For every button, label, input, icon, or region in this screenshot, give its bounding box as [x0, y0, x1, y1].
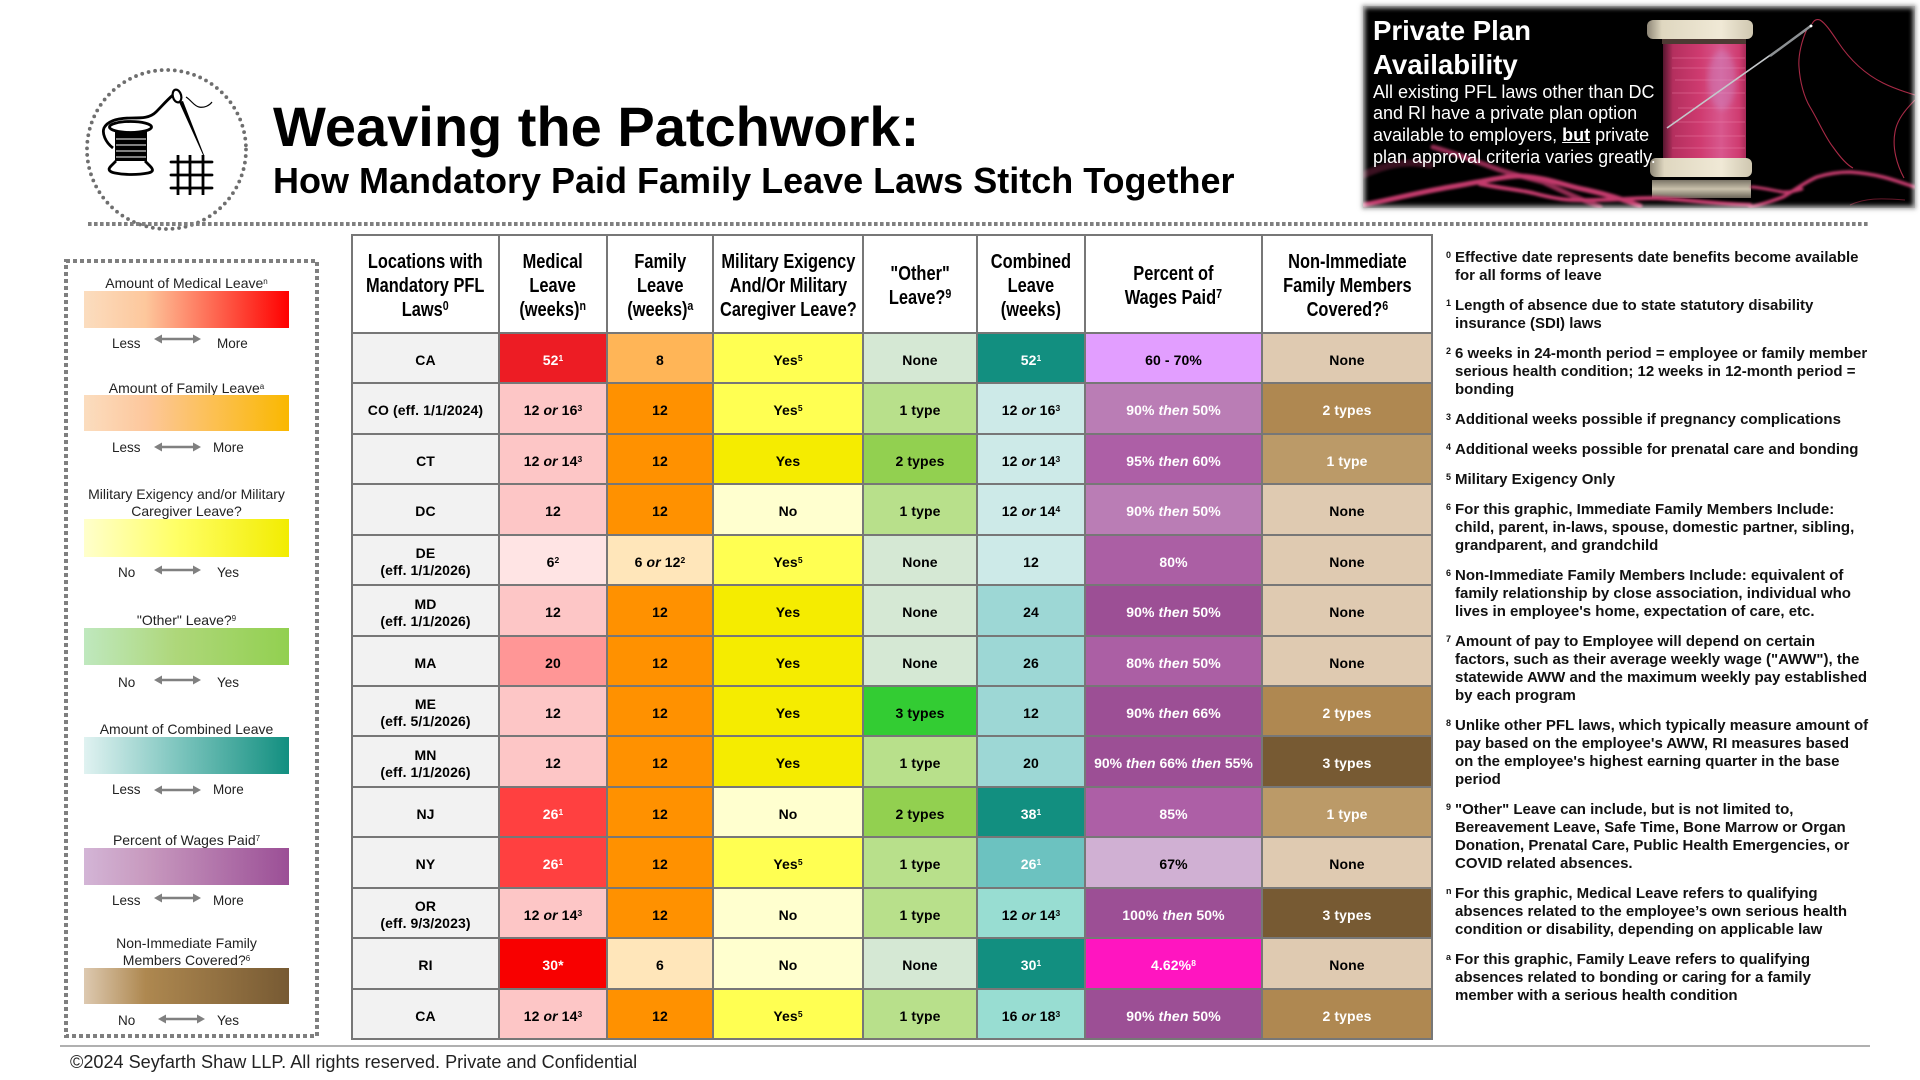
row: CA: None	[1329, 352, 1365, 368]
gradient bar: wages paid	[84, 848, 289, 885]
row: RI	[353, 939, 1431, 988]
row: RI: 4.62%8	[1151, 957, 1196, 973]
row: CT: 95% then 60%	[1126, 452, 1221, 468]
row: NY: 1 type	[899, 856, 941, 872]
legend item: family leave: More	[213, 440, 244, 454]
row: ME: Yes	[776, 704, 800, 720]
row: CA (second): 16 or 183	[1002, 1008, 1060, 1024]
footnote a	[1455, 951, 1811, 1005]
row: MD: 12	[652, 604, 668, 620]
row: NJ	[353, 788, 1431, 836]
column heading: locations	[353, 236, 498, 332]
footnote n: For this graphic, Medical Leave refers to qualifying	[1455, 885, 1818, 902]
footnote 2: 6 weeks in 24-month period = employee or family member	[1455, 345, 1867, 362]
row: CA (second): Yes5	[773, 1008, 803, 1024]
row: MA: None	[1329, 654, 1365, 670]
row: MD	[353, 586, 1431, 635]
footnote 1	[1446, 297, 1814, 332]
gradient bar: military leave	[84, 519, 289, 557]
column heading: family leave: (weeks)a	[627, 298, 693, 321]
row: ME	[353, 687, 1431, 735]
row: MN: 20	[1023, 755, 1039, 771]
row: MA: Yes	[776, 654, 800, 670]
heading: private plan availability: Private Plan	[1373, 15, 1531, 46]
text block: private plan note: and RI have a private plan option	[1373, 103, 1637, 123]
row: MN: 12	[652, 755, 668, 771]
row: OR: OR	[415, 898, 436, 914]
footnote 7: factors, such as their average weekly wage ("AWW"), the	[1455, 651, 1859, 668]
gradient bar: other leave	[84, 628, 289, 665]
row: MA: 20	[545, 654, 561, 670]
row: MD: 24	[1023, 604, 1039, 620]
table: paid family leave laws by location	[351, 234, 1433, 1040]
text block: private plan note	[1373, 82, 1656, 167]
row: NJ: 1 type	[1326, 806, 1368, 822]
column heading: combined leave: (weeks)	[1001, 299, 1061, 321]
footnote 8: pay based on the employee's AWW, RI measures based	[1455, 735, 1849, 752]
heading: private plan availability: Availability	[1373, 48, 1518, 80]
row: CT: 12 or 143	[524, 452, 582, 468]
row: NY: Yes5	[773, 856, 803, 872]
row: CA: 60 - 70%	[1145, 352, 1202, 368]
legend item: wages paid: More	[213, 892, 244, 908]
footnote 6: non-immediate family: Non-Immediate Family Members Include: equivalent of	[1455, 567, 1843, 584]
row: NJ: 85%	[1159, 806, 1188, 822]
footnote 2	[1446, 345, 1867, 398]
row: CT	[353, 435, 1431, 483]
row: RI: 301	[1021, 957, 1041, 973]
footnote 5: Military Exigency Only	[1455, 471, 1615, 488]
footnote 9: Donation, Prenatal Care, Public Health Emergencies, or	[1455, 837, 1849, 854]
arrow: less to more	[154, 894, 201, 902]
row: CA: 521	[543, 352, 563, 368]
row: NY: 67%	[1159, 856, 1188, 872]
column heading: medical leave: (weeks)n	[520, 298, 586, 321]
footnote 7	[1455, 633, 1867, 705]
footnote a: member with a serious health condition	[1455, 987, 1738, 1004]
text block: private plan note: All existing PFL laws other than DC	[1373, 82, 1654, 102]
column heading: locations: Laws0	[402, 298, 449, 321]
arrow: no to yes	[158, 1014, 205, 1024]
legend item: medical leave: More	[217, 336, 248, 350]
row: MA: MA	[414, 654, 436, 670]
footnotes: 2	[1446, 346, 1451, 356]
footnotes: n	[1446, 886, 1452, 896]
row: CO: 12	[652, 402, 668, 418]
footnotes: 3	[1446, 412, 1451, 422]
column heading: non-immediate family	[1263, 236, 1431, 332]
row: RI: None	[902, 957, 938, 973]
row: OR: 3 types	[1323, 906, 1371, 922]
row: DE: None	[1329, 554, 1365, 570]
column heading: locations: Locations with	[368, 251, 483, 273]
row: CO: Yes5	[773, 402, 803, 418]
row: ME: 2 types	[1323, 704, 1371, 720]
row: MA: 12	[652, 654, 668, 670]
column heading: combined leave: Leave	[1008, 275, 1054, 297]
legend item: other leave: No	[118, 674, 135, 690]
row: NY	[353, 838, 1431, 887]
row: CO: 1 type	[899, 402, 941, 418]
legend item: military leave: Caregiver Leave?	[131, 503, 242, 519]
footnotes: 4	[1446, 442, 1451, 452]
legend item: family leave	[84, 380, 289, 454]
row: MN: 90% then 66% then 55%	[1094, 755, 1253, 771]
row: OR: 1 type	[899, 906, 941, 922]
column heading: percent of wages	[1086, 236, 1261, 332]
footnote n: absences related to the employee’s own serious health	[1455, 903, 1847, 920]
row: MD: (eff. 1/1/2026)	[380, 612, 471, 628]
legend item: military leave: Military Exigency and/or Military	[88, 486, 285, 502]
legend item: medical leave	[84, 274, 289, 350]
row: DC: 90% then 50%	[1126, 503, 1221, 519]
row: NJ: NJ	[416, 806, 435, 822]
legend item: combined leave: Amount of Combined Leave	[100, 720, 273, 736]
column heading: non-immediate family: Non-Immediate	[1288, 251, 1406, 273]
row: MD: None	[1329, 604, 1365, 620]
row: OR	[353, 889, 1431, 937]
column heading: military leave: And/Or Military	[729, 275, 847, 297]
footnote 7: by each program	[1455, 687, 1576, 704]
row: MA: None	[902, 654, 938, 670]
row: CO: CO (eff. 1/1/2024)	[368, 402, 483, 418]
gradient bar: non-immediate family members	[84, 968, 289, 1004]
legend item: military leave: No	[118, 564, 135, 580]
row: ME: 12	[1023, 704, 1039, 720]
row: ME: 90% then 66%	[1126, 704, 1221, 720]
column heading: family leave: Family	[634, 251, 686, 273]
legend item: non-immediate family members: Members Covered?6	[123, 952, 250, 968]
row: MD: Yes	[776, 604, 800, 620]
footnotes: 1	[1446, 298, 1451, 308]
row: NY: 12	[652, 856, 668, 872]
column heading: medical leave	[500, 236, 606, 332]
footnote n	[1455, 885, 1847, 939]
legend item: medical leave: Less	[112, 336, 141, 350]
row: CT: 12 or 143	[1002, 452, 1060, 468]
row: CA: 8	[656, 352, 664, 368]
row: CO: 2 types	[1323, 402, 1371, 418]
row: DC: No	[779, 503, 797, 519]
title: Weaving the Patchwork:	[273, 95, 919, 158]
footnote 7: Amount of pay to Employee will depend on certain	[1455, 633, 1815, 650]
footnotes: 0	[1446, 250, 1451, 260]
footnote 6: non-immediate family: family relationship by close association, individual who	[1455, 585, 1851, 602]
footnotes: 6	[1446, 502, 1451, 512]
footnote 6: immediate family: For this graphic, Immediate Family Members Include:	[1455, 501, 1834, 518]
legend item: family leave: Less	[112, 440, 141, 454]
arrow: no to yes	[154, 566, 201, 574]
row: CA: CA	[415, 352, 436, 368]
footnote 6: immediate family: child, parent, in-laws, spouse, domestic partner, sibling,	[1455, 519, 1854, 536]
row: DE	[353, 536, 1431, 584]
row: ME: 12	[652, 704, 668, 720]
footnote 9: COVID related absences.	[1455, 855, 1633, 872]
footnote a: For this graphic, Family Leave refers to qualifying	[1455, 951, 1810, 968]
column heading: medical leave: Leave	[530, 275, 576, 297]
row: MA	[353, 637, 1431, 685]
footnote 8: on the employee's highest earning quarter in the base	[1455, 753, 1840, 770]
row: NJ: 12	[652, 806, 668, 822]
row: NY: 261	[543, 856, 563, 872]
row: CA: Yes5	[773, 352, 803, 368]
image: thread spool and needle	[1363, 19, 1915, 208]
row: DC: 12 or 144	[1002, 503, 1060, 519]
row: CA (second): 90% then 50%	[1126, 1008, 1221, 1024]
footnote 0: Effective date represents date benefits become available	[1455, 249, 1858, 266]
icon: dotted circle with spool, needle and stitches	[85, 68, 248, 231]
footnote 4: Additional weeks possible for prenatal care and bonding	[1455, 441, 1858, 458]
legend item: non-immediate family members: Non-Immediate Family	[116, 934, 257, 950]
legend item: non-immediate family members: No	[118, 1012, 135, 1028]
row: DE: None	[902, 554, 938, 570]
legend item: wages paid	[84, 832, 289, 908]
footnotes: 8	[1446, 718, 1451, 728]
footnote 0	[1446, 249, 1858, 284]
row: RI: 30*	[542, 957, 564, 973]
row: MN: 12	[545, 755, 561, 771]
footnote 2: serious health condition; 12 weeks in 12-month period =	[1455, 363, 1856, 380]
row: DC: 12	[545, 503, 561, 519]
row: CT: CT	[416, 452, 435, 468]
legend item: combined leave: More	[213, 782, 244, 796]
column heading: non-immediate family: Covered?6	[1306, 298, 1388, 321]
row: OR: 12 or 143	[524, 906, 582, 922]
row: MD: 12	[545, 604, 561, 620]
row: CO: 12 or 163	[524, 402, 582, 418]
column heading: other leave: Leave?9	[889, 286, 951, 309]
row: MN: MN	[414, 746, 436, 762]
row: CT: Yes	[776, 452, 800, 468]
row: DE: 12	[1023, 554, 1039, 570]
legend item: medical leave: Amount of Medical Leaven	[105, 274, 268, 290]
legend item: military leave: Yes	[217, 564, 239, 580]
footnote 9	[1455, 801, 1849, 873]
footnotes: a	[1446, 952, 1451, 962]
column heading: combined leave	[978, 236, 1084, 332]
column heading: combined leave: Combined	[991, 251, 1071, 273]
footnote 1: Length of absence due to state statutory disability	[1455, 297, 1813, 314]
row: ME: 12	[545, 704, 561, 720]
legend item: combined leave: Less	[112, 782, 141, 796]
column heading: non-immediate family: Family Members	[1283, 275, 1411, 297]
row: DE: Yes5	[773, 554, 803, 570]
column heading: percent of wages: Percent of	[1133, 263, 1214, 285]
footnote 0: for all forms of leave	[1455, 267, 1602, 284]
footnote 6: non-immediate family: lives in employee's home, expectation of care, etc.	[1455, 603, 1815, 620]
row: CA: None	[902, 352, 938, 368]
footnote 8: Unlike other PFL laws, which typically measure amount of	[1455, 717, 1868, 734]
footnote 8	[1455, 717, 1868, 789]
row: ME: 3 types	[896, 704, 944, 720]
footnotes: 9	[1446, 802, 1451, 812]
legend item: non-immediate family members	[84, 934, 289, 1028]
row: MN	[353, 737, 1431, 786]
column heading: military leave	[714, 236, 862, 332]
legend item: other leave: Yes	[217, 674, 239, 690]
gradient bar: combined leave	[84, 737, 289, 774]
row: CA (second): 12	[652, 1008, 668, 1024]
row: CO: 90% then 50%	[1126, 402, 1221, 418]
column heading: family leave	[608, 236, 712, 332]
column heading: family leave: Leave	[637, 275, 683, 297]
arrow: no to yes	[154, 676, 201, 684]
row: MA: 26	[1023, 654, 1039, 670]
row: DE: (eff. 1/1/2026)	[380, 562, 471, 578]
row: CA (second): 12 or 143	[524, 1008, 582, 1024]
gradient bar: family leave	[84, 395, 289, 431]
row: CA (second): 1 type	[899, 1008, 941, 1024]
row: RI: No	[779, 957, 797, 973]
row: MN: 1 type	[899, 755, 941, 771]
row: MA: 80% then 50%	[1126, 654, 1221, 670]
row: CA (second): CA	[415, 1008, 436, 1024]
legend item: family leave: Amount of Family Leavea	[109, 380, 264, 396]
row: DE: 6 or 122	[635, 554, 685, 570]
legend item: wages paid: Percent of Wages Paid7	[113, 832, 260, 848]
row: MN: 3 types	[1323, 755, 1371, 771]
row: CA	[353, 334, 1431, 382]
footnote 6: immediate family: grandparent, and grandchild	[1455, 537, 1658, 554]
heading: private plan availability	[1373, 15, 1531, 80]
arrow: less to more	[154, 786, 201, 794]
row: MN: (eff. 1/1/2026)	[380, 764, 471, 780]
row: MD: MD	[414, 596, 436, 612]
table header row	[353, 236, 1431, 332]
row: NY: 261	[1021, 856, 1041, 872]
row: DE: DE	[416, 545, 435, 561]
row: MD: 90% then 50%	[1126, 604, 1221, 620]
row: NY: None	[1329, 856, 1365, 872]
row: DC	[353, 485, 1431, 534]
column heading: military leave: Caregiver Leave?	[720, 299, 856, 321]
legend item: military leave	[84, 486, 289, 580]
row: NJ: 2 types	[896, 806, 944, 822]
column heading: other leave: "Other"	[890, 263, 950, 285]
arrow: less to more	[154, 442, 201, 452]
legend item: wages paid: Less	[112, 892, 141, 908]
row: DE: 80%	[1159, 554, 1188, 570]
row: CA (second)	[353, 990, 1431, 1038]
column heading: percent of wages: Wages Paid7	[1125, 286, 1222, 309]
text block: private plan note: available to employers, but private	[1373, 125, 1649, 145]
panel: private plan availability	[1363, 6, 1915, 208]
row: RI: RI	[418, 957, 433, 973]
footnote 6: non-immediate family	[1455, 567, 1851, 621]
row: CT: 12	[652, 452, 668, 468]
row: DC: 1 type	[899, 503, 941, 519]
row: RI: None	[1329, 957, 1365, 973]
row: CO	[353, 384, 1431, 433]
row: CT: 2 types	[896, 452, 944, 468]
row: RI: 6	[656, 957, 664, 973]
footnote 9: Bereavement Leave, Safe Time, Bone Marrow or Organ	[1455, 819, 1846, 836]
legend item: other leave: "Other" Leave?9	[137, 612, 236, 628]
footnotes: 7	[1446, 634, 1451, 644]
footnote a: absences related to bonding or caring for a family	[1455, 969, 1811, 986]
footnotes: 5	[1446, 472, 1451, 482]
row: OR: 100% then 50%	[1122, 906, 1225, 922]
footnote 7: statewide AWW and the maximum weekly pay established	[1455, 669, 1867, 686]
footnote 3: Additional weeks possible if pregnancy complications	[1455, 411, 1841, 428]
row: DE: 62	[547, 554, 559, 570]
row: NJ: 381	[1021, 806, 1041, 822]
row: CT: 1 type	[1326, 452, 1368, 468]
row: CA: 521	[1021, 352, 1041, 368]
footnote n: condition or disability, depending on applicable law	[1455, 921, 1822, 938]
legend item: other leave	[84, 612, 289, 690]
footnote 6: immediate family	[1455, 501, 1854, 555]
row: CA (second): 2 types	[1323, 1008, 1371, 1024]
row: DC: None	[1329, 503, 1365, 519]
footer: copyright: ©2024 Seyfarth Shaw LLP. All rights reserved. Private and Confidential	[70, 1052, 637, 1072]
column heading: other leave	[864, 236, 976, 332]
row: DC: DC	[415, 503, 436, 519]
row: ME: ME	[415, 696, 436, 712]
subtitle: How Mandatory Paid Family Leave Laws Stitch Together	[273, 160, 1235, 201]
row: OR: (eff. 9/3/2023)	[380, 915, 471, 931]
row: MN: Yes	[776, 755, 800, 771]
legend item: combined leave	[84, 720, 289, 796]
row: NJ: 261	[543, 806, 563, 822]
row: NJ: No	[779, 806, 797, 822]
panel: legend	[64, 259, 319, 1038]
footnote 9: "Other" Leave can include, but is not limited to,	[1455, 801, 1793, 818]
row: ME: (eff. 5/1/2026)	[380, 713, 471, 729]
row: OR: No	[779, 906, 797, 922]
row: OR: 12	[652, 906, 668, 922]
footnote 1: insurance (SDI) laws	[1455, 315, 1602, 332]
column heading: locations: Mandatory PFL	[366, 275, 485, 297]
row: CO: 12 or 163	[1002, 402, 1060, 418]
row: OR: 12 or 143	[1002, 906, 1060, 922]
footnotes: 6	[1446, 568, 1451, 578]
row: NY: NY	[416, 856, 435, 872]
arrow: less to more	[154, 334, 201, 344]
column heading: military leave: Military Exigency	[721, 251, 855, 273]
footnote 8: period	[1455, 771, 1501, 788]
row: MD: None	[902, 604, 938, 620]
row: DC: 12	[652, 503, 668, 519]
column heading: medical leave: Medical	[523, 251, 583, 273]
text block: private plan note: plan approval criteria varies greatly.	[1373, 147, 1656, 167]
gradient bar: medical leave	[84, 291, 289, 328]
footnote 2: bonding	[1455, 381, 1514, 398]
footnotes	[1446, 249, 1868, 1004]
legend item: non-immediate family members: Yes	[217, 1012, 239, 1028]
